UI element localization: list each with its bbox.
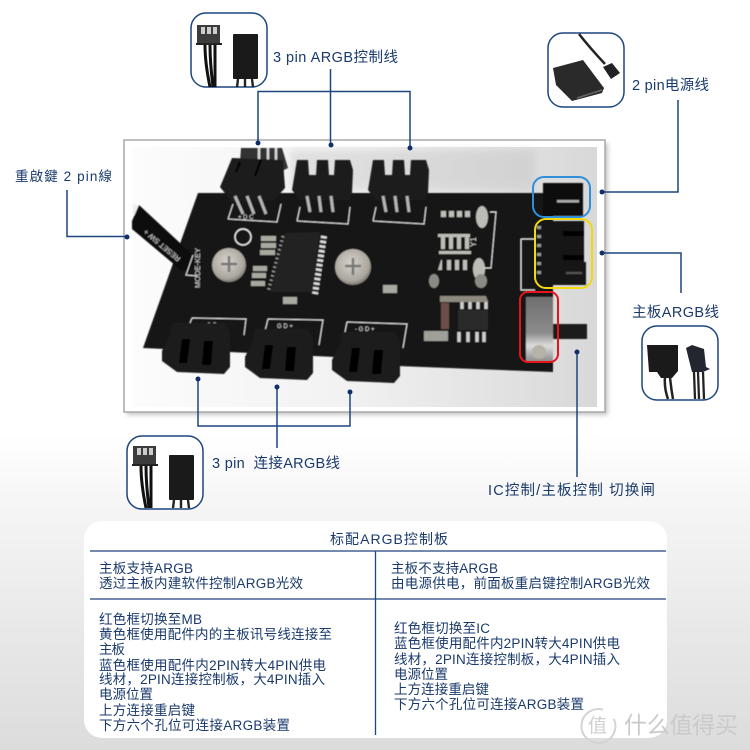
top connector J4 (220, 148, 288, 222)
right header: 由电源供电，前面板重启键控制ARGB光效 (391, 575, 650, 591)
right header (391, 561, 650, 591)
crystal and small parts: Y1 (469, 237, 478, 247)
watermark (574, 703, 738, 750)
icon: motherboard cable (642, 326, 718, 400)
blue box connector (543, 183, 583, 216)
leader: bottom connectors (196, 376, 352, 448)
watermark: 什么值得买 (624, 712, 738, 738)
leader: top connectors (256, 69, 412, 150)
right body text: 下方六个孔位可连接ARGB装置 (394, 696, 584, 712)
leader: reset key (67, 190, 130, 240)
panel: board photo (124, 140, 608, 415)
bottom connectors: - G D + (355, 327, 375, 333)
top connector J5 (292, 160, 353, 224)
left header: 透过主板内建软件控制ARGB光效 (99, 576, 304, 591)
leader: switch (574, 350, 580, 477)
silk label: mode key: MODE-KEY (193, 248, 202, 288)
left header (99, 561, 304, 591)
red highlight box (520, 292, 558, 362)
control board (132, 148, 587, 383)
right body text: 电源位置 (394, 667, 448, 682)
bottom connectors: G D + (277, 324, 293, 330)
label: switch: IC控制/主板控制 切换闸 (488, 481, 655, 499)
blue highlight box (533, 177, 590, 217)
main chip (268, 232, 324, 294)
screw left (212, 248, 246, 282)
switch (526, 297, 587, 362)
yellow box connector (539, 221, 586, 285)
watermark: 值 (588, 715, 607, 737)
reset connector (132, 204, 197, 276)
crystal and small parts (424, 206, 496, 342)
panel: spec table (84, 521, 667, 738)
screw right (335, 249, 371, 285)
icon: 2 pin power cable (548, 33, 624, 107)
right body text: 蓝色框使用配件内2PIN转大4PIN供电 (394, 635, 620, 651)
right body text: 线材，2PIN连接控制板，大4PIN插入 (394, 651, 620, 667)
right silk box (521, 239, 535, 290)
label: 3 pin control cable: 3 pin ARGB控制线 (273, 49, 398, 66)
table title: 标配ARGB控制板 (330, 531, 448, 547)
left body text: 线材，2PIN连接控制板，大4PIN插入 (99, 671, 326, 687)
badge (235, 229, 251, 245)
left body text: 电源位置 (99, 687, 153, 702)
right body text: 上方连接重启键 (394, 681, 490, 697)
left body text: 上方连接重启键 (99, 702, 196, 718)
right header: 主板不支持ARGB (391, 561, 498, 576)
right body text (394, 620, 620, 712)
top connector J6 (368, 160, 429, 224)
label: reset key: 重啟鍵 2 pin線 (15, 169, 112, 184)
left body text: 下方六个孔位可连接ARGB装置 (99, 717, 290, 733)
label: 3 pin connect cable: 3 pin 连接ARGB线 (212, 455, 340, 472)
left body text (99, 611, 332, 733)
resistors (251, 236, 397, 304)
bottom connectors (162, 318, 407, 383)
label: motherboard ARGB cable: 主板ARGB线 (632, 303, 719, 321)
left body text: 蓝色框使用配件内2PIN转大4PIN供电 (99, 657, 326, 673)
top connector J4: + D C (238, 215, 254, 221)
yellow highlight box (535, 219, 592, 288)
reset connector: RESET SW + (141, 227, 182, 263)
leader: motherboard cable (600, 250, 681, 293)
icon: bottom 3 pin cable (127, 436, 203, 509)
leader: 2 pin power (600, 100, 678, 194)
left body text: 黄色框使用配件内的主板讯号线连接至 (99, 626, 332, 642)
bottom connectors: - G D + (203, 323, 223, 329)
left header: 主板支持ARGB (99, 561, 193, 576)
icon: top 3 pin cable (191, 13, 267, 87)
left body text: 红色框切换至MB (99, 611, 202, 627)
left body text: 主板 (99, 642, 126, 657)
right body text: 红色框切换至IC (394, 620, 490, 636)
label: 2 pin power: 2 pin电源线 (632, 77, 709, 94)
